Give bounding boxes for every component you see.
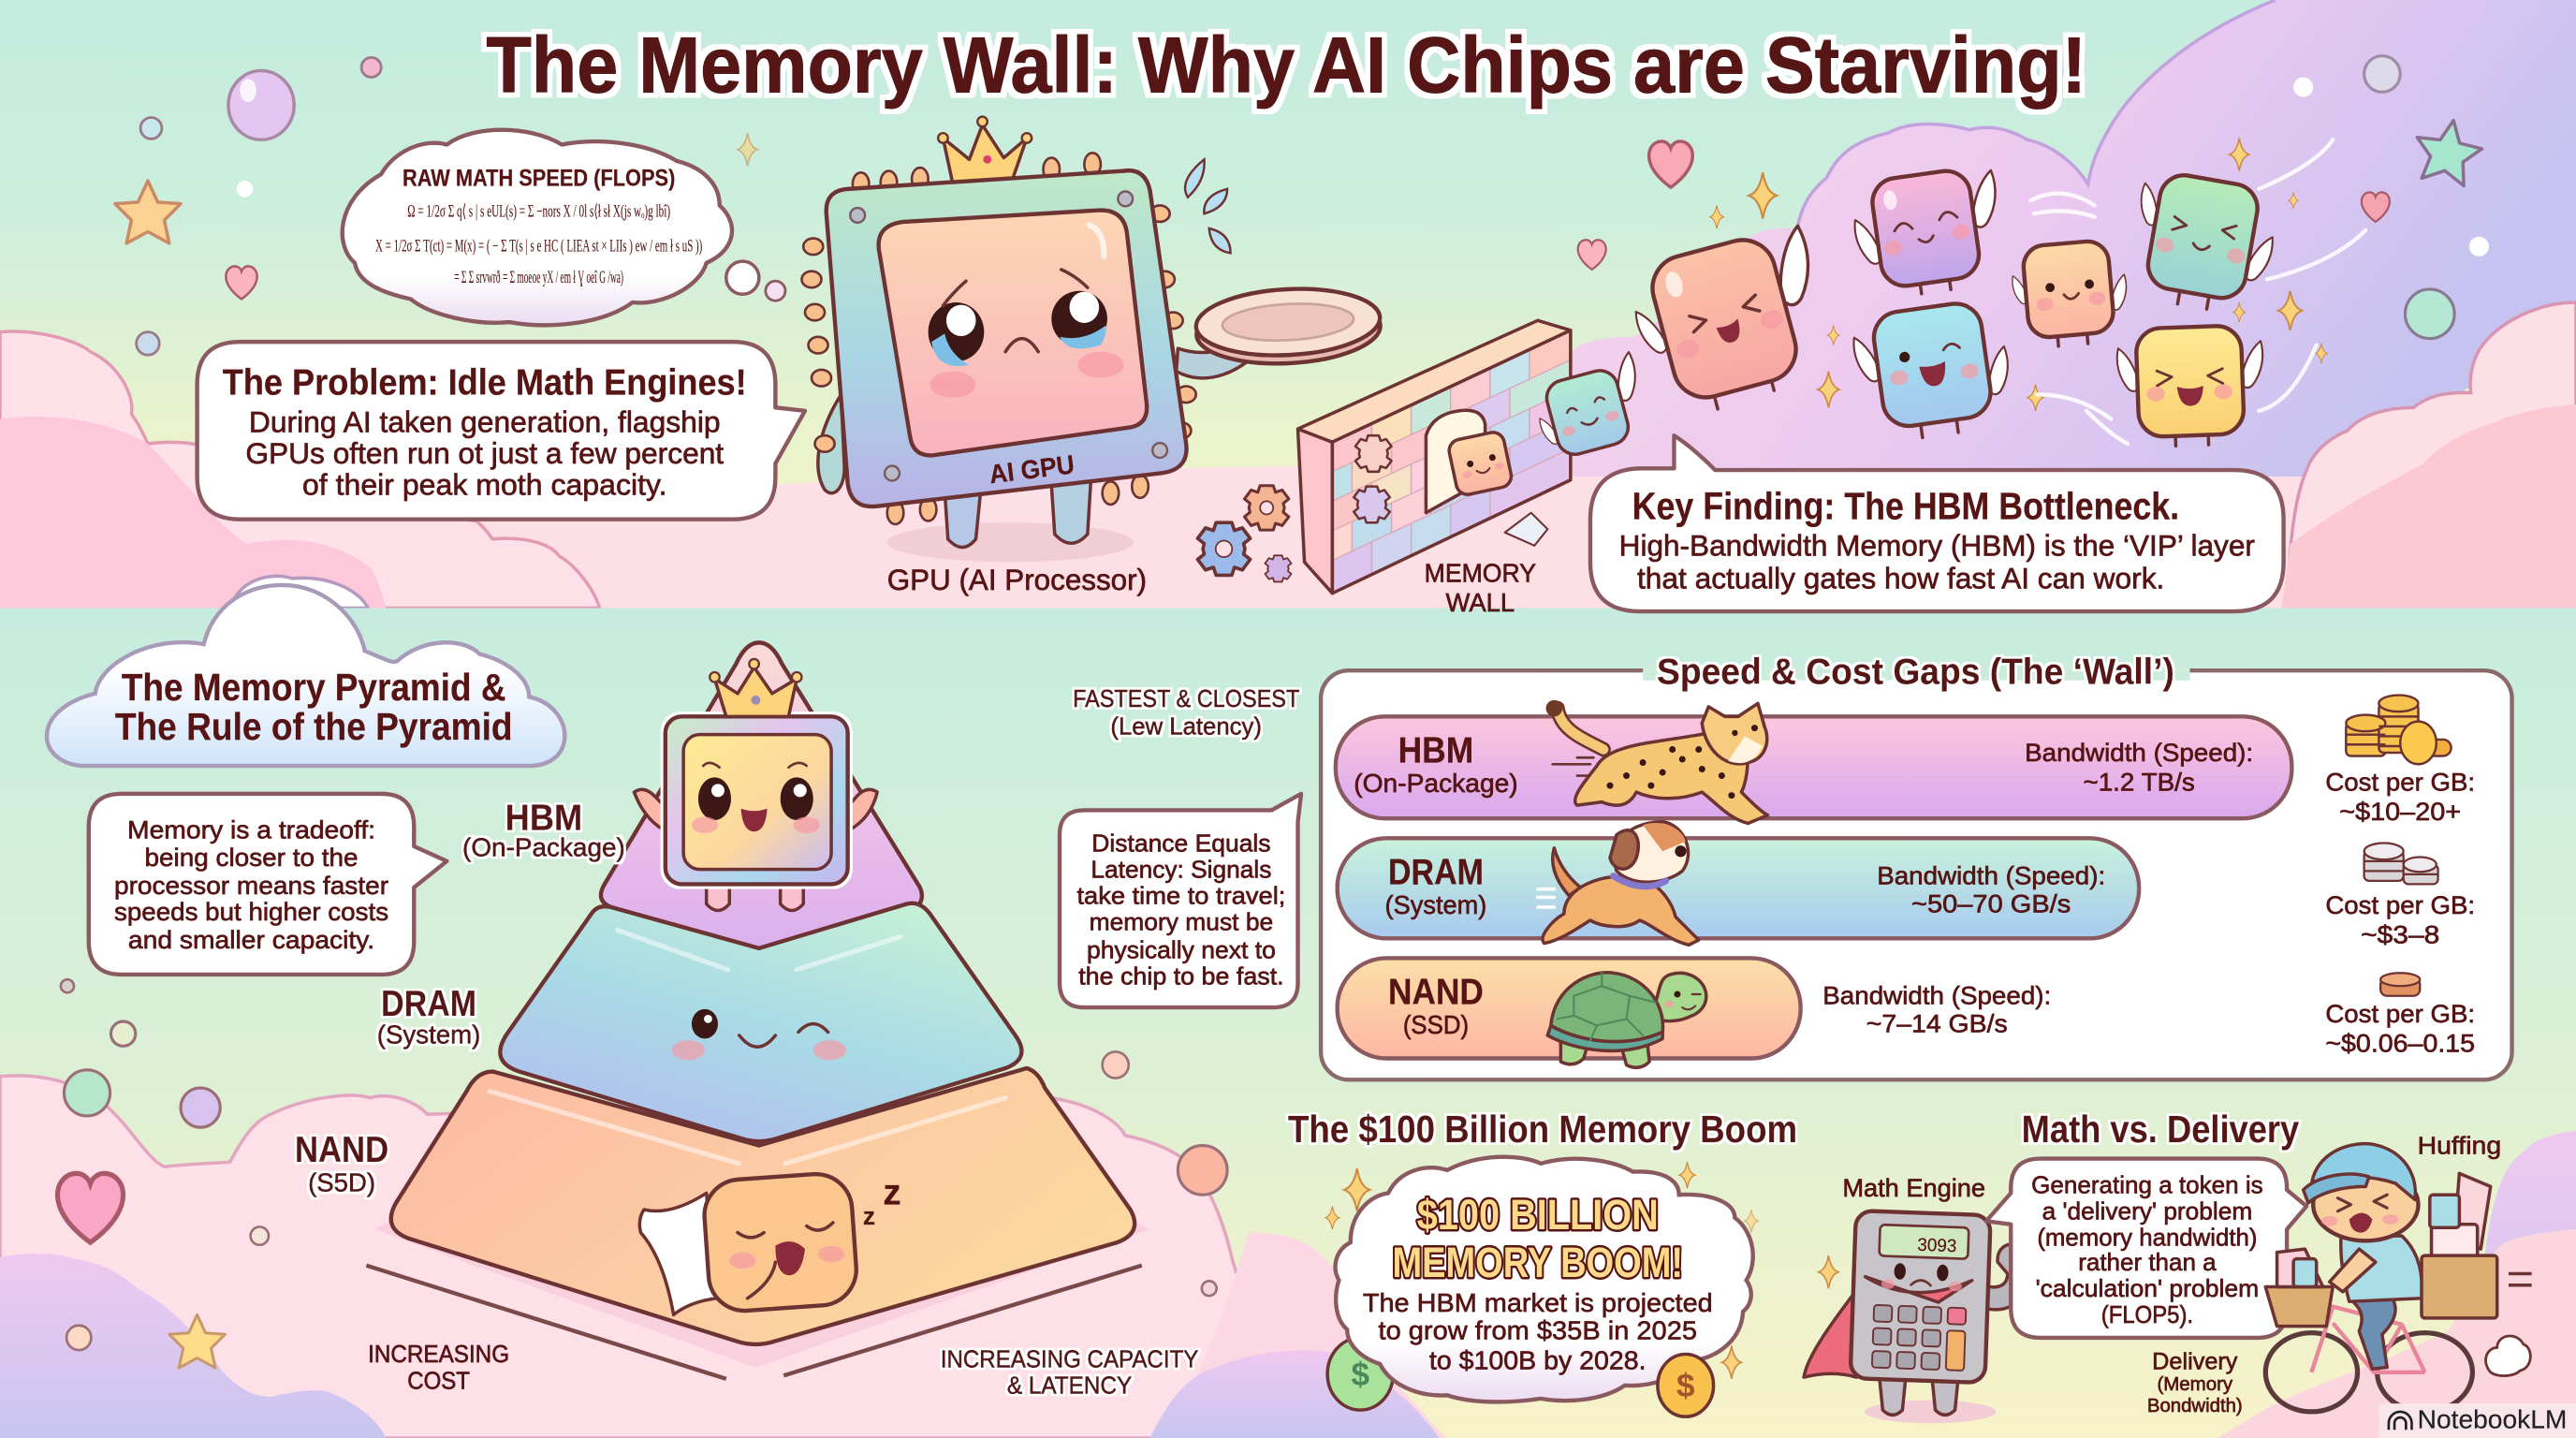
arm <box>2330 1249 2376 1292</box>
legs <box>944 480 1090 548</box>
cost: HBM: Cost per GB: <box>2325 767 2475 796</box>
character: sleeping NAND chip <box>639 1172 858 1314</box>
plate <box>1194 285 1382 368</box>
label: delivery: Bondwidth) <box>2147 1396 2243 1416</box>
formulas: = Σ Σ srvwrð = Σ moeoe yX / em ł Ɣ oeî G /wa) <box>454 268 623 287</box>
cloud: deeper pink left <box>0 417 386 609</box>
flying chip: pink <box>1849 165 2008 301</box>
DRAM face <box>672 1009 846 1060</box>
bar: HBM: HBM <box>1398 731 1473 771</box>
cape <box>1804 1290 1922 1377</box>
axis label: increasing cost: INCREASING <box>368 1342 509 1368</box>
speed: NAND: Bandwidth (Speed): <box>1822 981 2051 1010</box>
bar: NAND <box>1338 958 1801 1058</box>
panel: speed and cost gaps <box>1321 652 2512 1079</box>
label: memory wall <box>1425 558 1536 617</box>
pyramid labels: HBM <box>505 798 582 838</box>
label: huffing: Huffing <box>2418 1131 2501 1159</box>
label: fastest and closest <box>1073 686 1299 741</box>
body: High-Bandwidth Memory (HBM) is the ‘VIP’ layer <box>1619 528 2255 562</box>
pyramid labels <box>295 798 625 1197</box>
cloud: deeper pink bottom right <box>2282 404 2576 609</box>
pyramid labels: DRAM <box>381 984 476 1024</box>
label: fastest and closest: FASTEST & CLOSEST <box>1073 686 1299 712</box>
crown <box>938 117 1032 184</box>
icon: yellow star <box>169 1314 225 1368</box>
icon: green money bag: $ <box>1351 1357 1369 1393</box>
icon: gold coin: $ <box>1676 1368 1695 1404</box>
speech box: distance equals latency: memory must be <box>1090 910 1273 936</box>
animal: cheetah <box>1546 700 1767 823</box>
pyramid labels: (System) <box>377 1020 480 1049</box>
cost: HBM: ~$10–20+ <box>2339 797 2461 826</box>
label: math engine: Math Engine <box>1842 1173 1985 1202</box>
bar: DRAM: DRAM <box>1388 852 1484 892</box>
flying chip: teal <box>1529 352 1652 462</box>
character: calculator <box>1804 1211 2026 1423</box>
body: that actually gates how fast AI can work. <box>1637 561 2164 594</box>
title cloud: memory pyramid <box>47 585 564 766</box>
bar: NAND: NAND <box>1388 973 1484 1013</box>
cloud: pink bottom right <box>2217 1229 2576 1438</box>
outer plate <box>827 170 1187 506</box>
boom body: to grow from $35B in 2025 <box>1379 1316 1697 1345</box>
face <box>692 763 820 833</box>
character: HBM chip with crown <box>634 659 877 911</box>
sparkles and hearts top right <box>1578 56 2489 444</box>
character: delivery cyclist <box>2265 1144 2497 1412</box>
thought cloud: raw math speed <box>343 130 732 325</box>
speech box: distance equals latency: take time to travel; <box>1076 883 1285 909</box>
speech box: distance equals latency: physically next to <box>1087 937 1276 963</box>
core die <box>879 211 1147 455</box>
speech box: tradeoff: being closer to the <box>144 843 359 872</box>
cloud: pink centre <box>1150 1233 1445 1438</box>
shard <box>1505 513 1547 546</box>
body <box>1619 528 2255 594</box>
right arm <box>1177 337 1262 378</box>
face <box>929 270 1123 398</box>
heading: The Problem: Idle Math Engines! <box>223 362 747 403</box>
formulas: Ω = 1/2σ Σ q⟨ s | s eUL(s) = Σ −nors X / 0l s⟨ł sł X(js wₒ)g lbî) <box>407 202 670 222</box>
icon: zzz <box>863 1173 901 1230</box>
heading: math vs delivery: Math vs. Delivery <box>2022 1108 2300 1151</box>
wall front bricks <box>1332 330 1571 594</box>
label: memory wall: MEMORY <box>1425 558 1536 587</box>
cloud outline: purple top right <box>1797 0 2276 228</box>
wall gears <box>1355 435 1392 472</box>
icon: green money bag <box>1327 1338 1393 1410</box>
flying chip: blue <box>1850 298 2016 446</box>
sweat drops <box>1185 159 1231 253</box>
sparkles around boom <box>1325 1162 1838 1379</box>
cost: DRAM <box>2325 890 2475 949</box>
cost: DRAM: ~$3–8 <box>2361 920 2439 949</box>
icon: copper coin <box>2380 973 2420 996</box>
icon: star <box>115 181 181 243</box>
pyramid labels: (S5D) <box>308 1168 375 1197</box>
icon: zzz: z <box>883 1173 901 1213</box>
bar: HBM <box>1336 716 2291 818</box>
speech box: delivery problem: (memory handwidth) <box>2037 1225 2258 1252</box>
speech box: delivery problem: 'calculation' problem <box>2036 1276 2259 1302</box>
axis label: increasing capacity: & LATENCY <box>1007 1373 1132 1400</box>
axis label: increasing capacity: INCREASING CAPACITY <box>941 1347 1198 1373</box>
speech box: tradeoff <box>89 794 446 975</box>
flying chip: peach <box>1623 224 1840 423</box>
legs <box>1880 1377 1958 1415</box>
icon: gold coin <box>1658 1354 1714 1416</box>
icons: gears <box>1197 486 1292 581</box>
body: GPUs often run ot just a few percent <box>245 436 724 470</box>
boom body: to $100B by 2028. <box>1429 1345 1647 1374</box>
label: delivery: Delivery <box>2152 1349 2238 1374</box>
head <box>2313 1168 2419 1240</box>
animal: dog <box>1538 822 1699 945</box>
cost: DRAM: Cost per GB: <box>2325 890 2475 919</box>
icon: pink heart <box>58 1173 124 1242</box>
speech box: tradeoff: processor means faster <box>114 871 388 900</box>
title: The Memory Wall: Why AI Chips are Starving! <box>487 21 2086 109</box>
arms <box>634 789 667 829</box>
formulas: X = 1/2σ Σ T(ct) = M(x) = ( − Σ T(s | s e HC ( LIEA st × LIIs ) ew / em ł s uS )) <box>375 237 702 257</box>
cap <box>2311 1144 2415 1199</box>
cloud: purple lower left <box>0 1254 386 1438</box>
body: of their peak moth capacity. <box>302 467 667 501</box>
speech box: tradeoff: speeds but higher costs <box>114 897 388 926</box>
axis label: increasing cost: COST <box>407 1368 470 1394</box>
character: AI GPU chip <box>801 117 1382 562</box>
cloud: memory boom <box>1336 1157 1753 1401</box>
layer: HBM top <box>601 642 922 948</box>
cloud: pink bottom right <box>2287 302 2576 609</box>
cloud: pink lower left <box>0 1076 1281 1438</box>
title cloud: memory pyramid: The Rule of the Pyramid <box>115 705 513 748</box>
arm <box>1984 1244 2026 1310</box>
bar: HBM: (On-Package) <box>1354 769 1518 798</box>
frame <box>2311 1307 2425 1372</box>
icon: equals marks <box>2509 1273 2532 1285</box>
icon: zzz: z <box>863 1202 875 1230</box>
wheels <box>2265 1333 2472 1412</box>
speech box: tradeoff: and smaller capacity. <box>128 925 374 954</box>
speech box: key finding <box>1590 435 2284 611</box>
speech box: the problem <box>198 342 805 520</box>
heading text: The Memory Pyramid & <box>122 666 506 709</box>
pins <box>801 153 1196 524</box>
formulas <box>375 202 702 287</box>
speech box: delivery problem: Generating a token is <box>2031 1172 2263 1198</box>
speech box: distance equals latency: Distance Equals <box>1091 830 1271 857</box>
speech box: delivery problem <box>1986 1159 2306 1338</box>
cost: NAND: Cost per GB: <box>2325 999 2475 1028</box>
boom body: The HBM market is projected <box>1363 1288 1713 1317</box>
bar: DRAM <box>1338 838 2139 938</box>
bar: DRAM: (System) <box>1385 890 1486 919</box>
speed: NAND <box>1822 981 2051 1037</box>
cloud: purple centre <box>1150 1350 1439 1438</box>
wall end face <box>1298 429 1332 594</box>
speech box: distance equals latency: the chip to be fast. <box>1078 963 1284 990</box>
memory wall <box>1298 320 1571 594</box>
box <box>2422 1255 2497 1318</box>
bar: HBM: Bandwidth (Speed): <box>2025 738 2253 767</box>
layer: DRAM middle <box>500 903 1021 1141</box>
body <box>245 405 724 501</box>
cloud: pink left <box>0 331 600 609</box>
bar: NAND: (SSD) <box>1403 1010 1469 1039</box>
icon: exhaust puff <box>2486 1336 2530 1376</box>
layer: NAND base <box>391 1068 1134 1344</box>
cost: NAND <box>2325 999 2475 1057</box>
cloud: memory boom: MEMORY BOOM! <box>1392 1239 1683 1286</box>
screws <box>850 192 1167 480</box>
watermark: NotebookLM: NotebookLM <box>2418 1404 2567 1433</box>
background: ground <box>0 465 2576 609</box>
chip stuck in wall <box>1447 431 1514 496</box>
body: During AI taken generation, flagship <box>249 405 721 439</box>
animal: turtle <box>1547 973 1706 1067</box>
watermark: NotebookLM <box>2378 1403 2576 1438</box>
frame <box>661 712 853 889</box>
label: GPU (AI Processor): GPU (AI Processor) <box>887 563 1147 596</box>
decorative bubbles top left <box>137 57 785 355</box>
icon: heart <box>226 266 257 299</box>
background: lower panel <box>0 609 2576 1438</box>
bar: HBM: ~1.2 TB/s <box>2083 767 2195 796</box>
white cloud peek <box>230 576 368 609</box>
pillow <box>639 1193 716 1314</box>
wall hole <box>1426 410 1486 513</box>
wall top face <box>1298 320 1571 442</box>
flying chip: green <box>2124 169 2282 318</box>
cost: HBM <box>2325 767 2475 826</box>
flying chip: yellow <box>2116 325 2265 448</box>
cloud: purple bottom right <box>2472 1131 2576 1438</box>
axis label: increasing cost <box>368 1342 509 1394</box>
body: 3093 <box>1917 1236 1957 1256</box>
axis label: increasing capacity <box>941 1347 1198 1400</box>
background: top panel <box>0 0 2576 609</box>
heading: raw math speed: RAW MATH SPEED (FLOPS) <box>402 166 675 191</box>
left arm <box>818 394 844 493</box>
basket <box>2265 1287 2333 1327</box>
face <box>2338 1195 2387 1211</box>
packages <box>2430 1173 2491 1257</box>
legs <box>2349 1285 2395 1369</box>
axis lines <box>366 1266 1142 1379</box>
icon: gold coins <box>2346 696 2452 764</box>
icon: sparkle <box>738 133 757 166</box>
bar: DRAM: Bandwidth (Speed): <box>1877 860 2105 889</box>
pyramid labels: NAND <box>295 1130 388 1170</box>
icon: silver coins <box>2364 844 2438 884</box>
cloud: purple top right <box>1560 0 2576 477</box>
decorative bubbles lower left <box>61 979 1227 1350</box>
bar: DRAM: ~50–70 GB/s <box>1911 888 2071 917</box>
crown <box>710 659 801 716</box>
legs <box>707 886 803 911</box>
speech box: distance equals latency <box>1060 794 1301 1007</box>
heading: memory boom: The $100 Billion Memory Boom <box>1288 1108 1797 1151</box>
boom headline: $100 BILLION <box>1417 1191 1659 1239</box>
cost: NAND: ~$0.06–0.15 <box>2325 1028 2475 1057</box>
pyramid shadow <box>374 1183 1150 1368</box>
chip label: AI GPU <box>988 449 1076 489</box>
label: delivery: (Memory <box>2157 1374 2233 1395</box>
memory pyramid <box>374 642 1150 1368</box>
speech box: delivery problem: a 'delivery' problem <box>2042 1199 2252 1225</box>
heading: Speed & Cost Gaps (The ‘Wall’) <box>1657 652 2174 692</box>
label: delivery <box>2147 1349 2243 1416</box>
speech box: tradeoff: Memory is a tradeoff: <box>127 814 375 844</box>
heading: Key Finding: The HBM Bottleneck. <box>1632 485 2179 528</box>
speech box: delivery problem: (FLOP5). <box>2101 1302 2193 1328</box>
speed: NAND: ~7–14 GB/s <box>1866 1008 2008 1037</box>
body <box>702 1172 858 1313</box>
torso <box>2341 1236 2422 1301</box>
speech box: delivery problem: rather than a <box>2078 1250 2217 1276</box>
pyramid labels: (On-Package) <box>462 833 625 862</box>
flying chip: orange <box>2010 239 2131 350</box>
label: fastest and closest: (Lew Latency) <box>1110 714 1262 741</box>
label: memory wall: WALL <box>1445 588 1515 617</box>
boom body <box>1363 1288 1713 1374</box>
body <box>1851 1211 1991 1383</box>
speech box: distance equals latency: Latency: Signals <box>1090 857 1271 883</box>
